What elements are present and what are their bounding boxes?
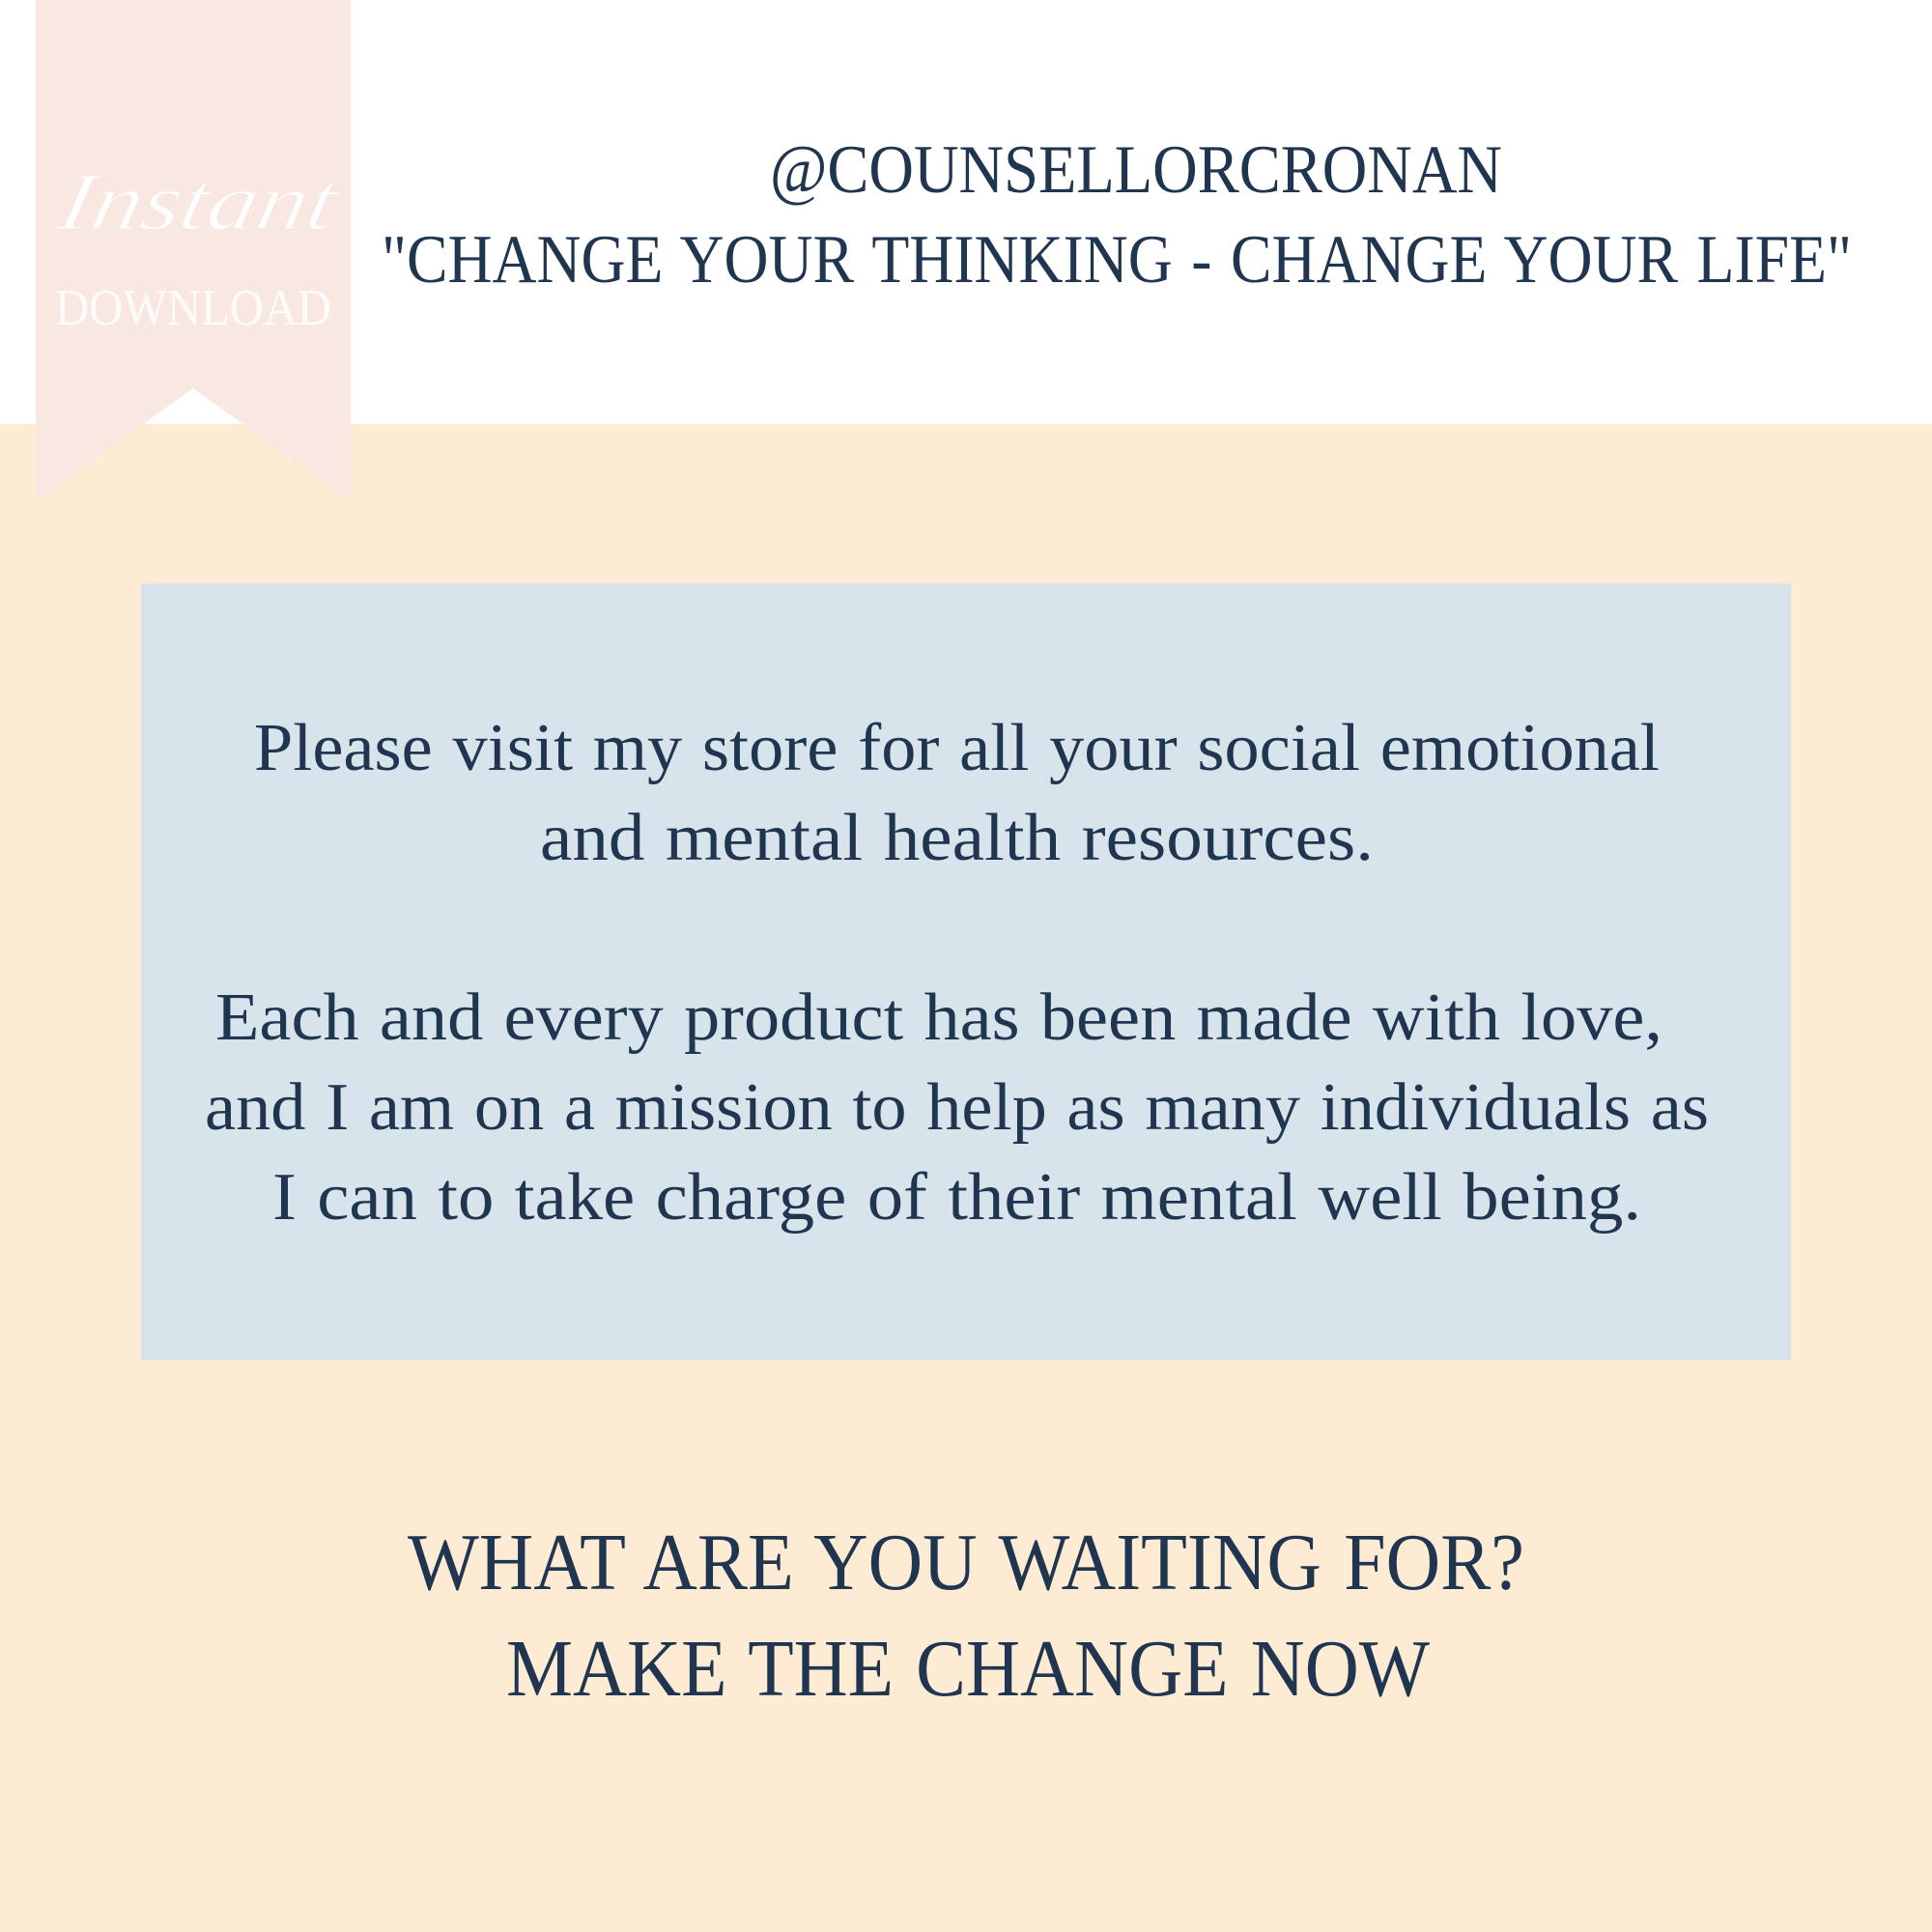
paragraph: mission statement <box>205 980 1709 1235</box>
paragraph: store invitation <box>254 711 1660 875</box>
call to action heading: WHAT ARE YOU WAITING FOR? <box>408 1518 1524 1607</box>
ribbon script word: Instant <box>50 157 349 247</box>
panel: store message <box>141 583 1791 1360</box>
paragraph: store invitation: Please visit my store for all your social emotional <box>254 711 1660 785</box>
header title <box>382 132 1852 298</box>
paragraph: store invitation: and mental health resources. <box>540 801 1374 875</box>
ribbon caps word: DOWNLOAD <box>55 280 331 336</box>
handle line: @COUNSELLORCRONAN <box>770 132 1502 208</box>
ribbon: instant download badge <box>36 0 351 501</box>
paragraph: mission statement: Each and every product has been made with love, <box>215 980 1662 1055</box>
paragraph: mission statement: and I am on a mission to help as many individuals as <box>205 1070 1709 1145</box>
call to action heading: MAKE THE CHANGE NOW <box>506 1624 1431 1714</box>
peach background panel <box>0 424 1932 1932</box>
call to action heading <box>408 1518 1524 1714</box>
paragraph: mission statement: I can to take charge of their mental well being. <box>272 1160 1641 1235</box>
